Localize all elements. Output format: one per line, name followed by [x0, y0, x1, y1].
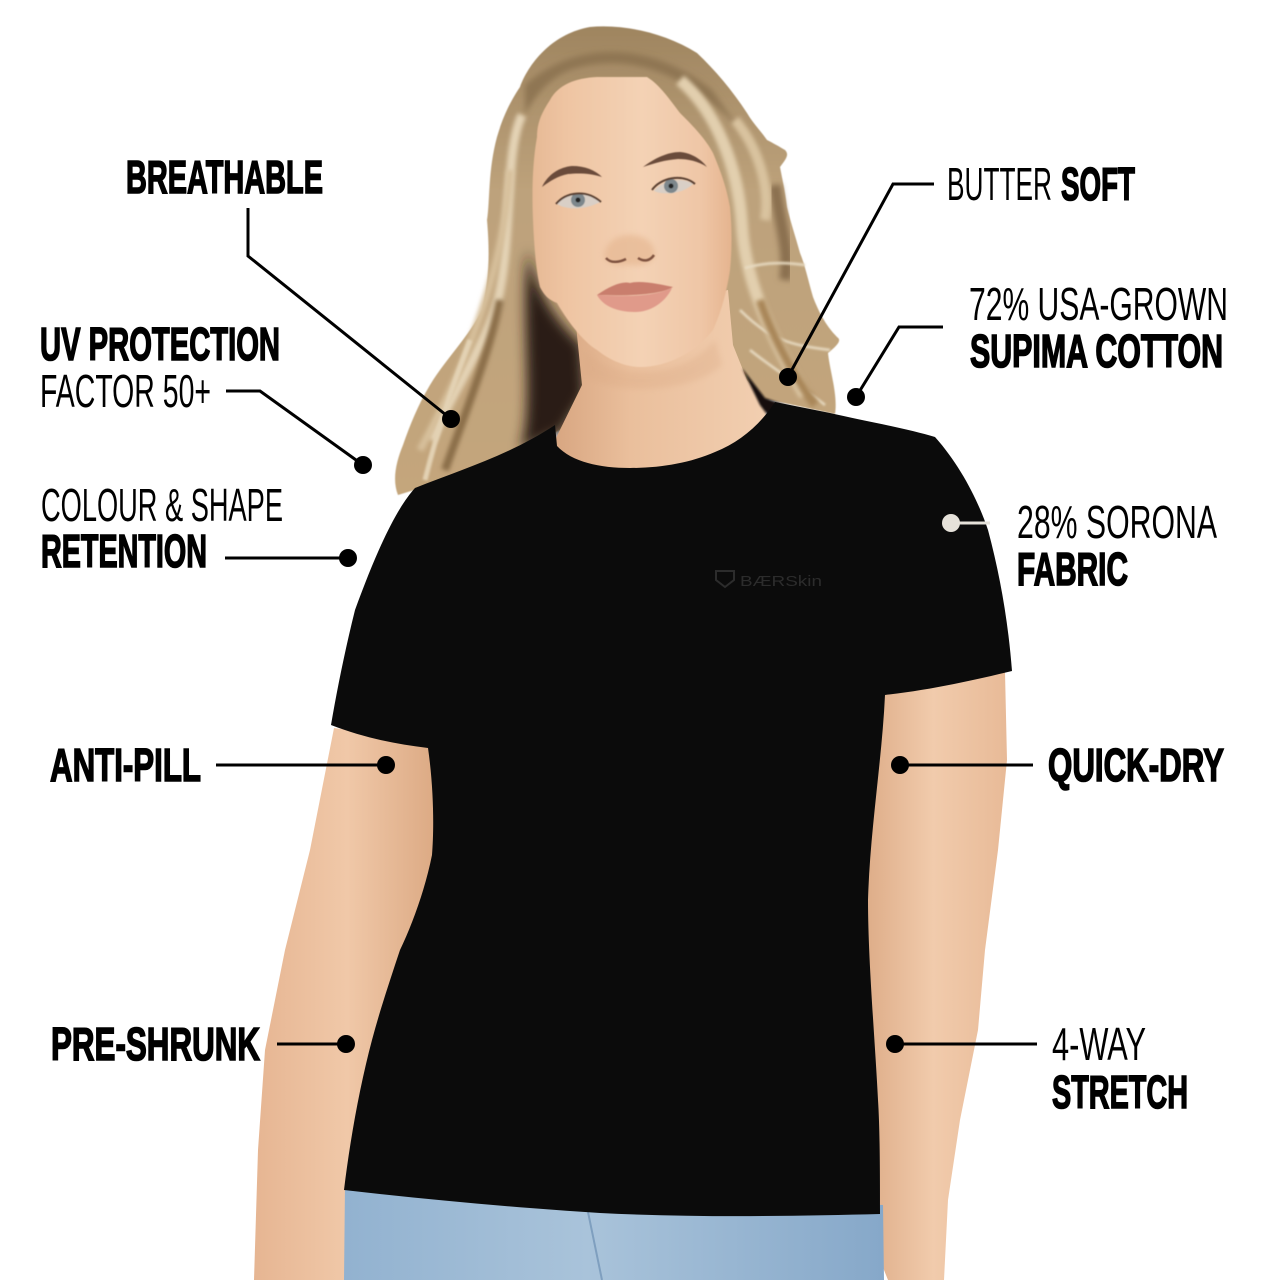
jeans: [344, 1185, 884, 1280]
left arm: [254, 728, 440, 1280]
callout: 4-way stretch: [886, 1018, 1188, 1118]
callout: 4-way stretch: STRETCH: [1052, 1066, 1188, 1118]
eye: right: [652, 178, 695, 193]
nose: [604, 235, 655, 265]
callout: anti-pill: [50, 739, 395, 791]
lips: [597, 282, 673, 312]
callout: pre-shrunk: PRE-SHRUNK: [51, 1018, 260, 1070]
callout: colour and shape retention: COLOUR & SHAPE: [41, 479, 283, 531]
callout: butter soft: BUTTER: [947, 158, 1052, 210]
chin shadow on neck: [585, 340, 722, 389]
neck: [555, 290, 770, 490]
dark collar shadow behind neck: [742, 368, 800, 425]
callout: uv protection: [40, 318, 372, 474]
callout: quick-dry: [891, 739, 1224, 791]
callout: breathable: BREATHABLE: [126, 151, 323, 203]
eyebrows: [542, 152, 707, 187]
callout: supima cotton: [847, 278, 1228, 406]
shirt logo: BÆRSkin: [740, 573, 822, 590]
callout: breathable: [126, 151, 460, 428]
callout: sorona fabric: [942, 496, 1217, 595]
eye: left: [556, 193, 601, 208]
callout: 4-way stretch: 4-WAY: [1052, 1018, 1146, 1070]
callout: uv protection: FACTOR 50+: [40, 365, 211, 417]
right arm: [860, 672, 1007, 1280]
callout: uv protection: UV PROTECTION: [40, 318, 280, 370]
dark hair shadow beside neck: [520, 250, 585, 450]
model wearing black t-shirt: [254, 26, 1012, 1280]
face: [532, 77, 732, 367]
callout: anti-pill: ANTI-PILL: [50, 739, 201, 791]
t-shirt: [331, 402, 1012, 1216]
callout: butter soft: [779, 158, 1135, 386]
shirt logo: [716, 571, 822, 590]
callout: colour and shape retention: [41, 479, 357, 577]
hair: [395, 26, 839, 495]
callout: butter soft: SOFT: [1061, 158, 1135, 210]
callout: sorona fabric: FABRIC: [1017, 543, 1128, 595]
callout: colour and shape retention: RETENTION: [41, 525, 207, 577]
